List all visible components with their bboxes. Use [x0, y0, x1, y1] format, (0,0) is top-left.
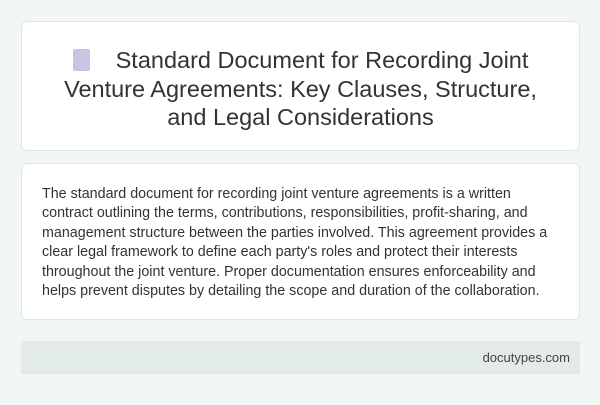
text block: clear legal framework to define each party's roles and protect their interests [42, 244, 518, 260]
text block: helps prevent disputes by detailing the scope and duration of the collaboration. [42, 283, 540, 299]
panel: description [21, 163, 580, 320]
footer [21, 341, 580, 374]
text block [42, 186, 548, 299]
text block: contract outlining the terms, contributions, responsibilities, profit-sharing, and [42, 205, 528, 221]
panel: title [21, 21, 580, 151]
text block: The standard document for recording joint venture agreements is a written [42, 186, 511, 202]
text block: throughout the joint venture. Proper documentation ensures enforceability and [42, 264, 536, 280]
text block: management structure between the parties involved. This agreement provides a [42, 225, 547, 241]
title: and Legal Considerations [167, 104, 434, 130]
title: Venture Agreements: Key Clauses, Structure, [64, 76, 537, 102]
title [64, 47, 537, 130]
title: Standard Document for Recording Joint [116, 47, 528, 73]
footer: docutypes.com [483, 350, 570, 365]
